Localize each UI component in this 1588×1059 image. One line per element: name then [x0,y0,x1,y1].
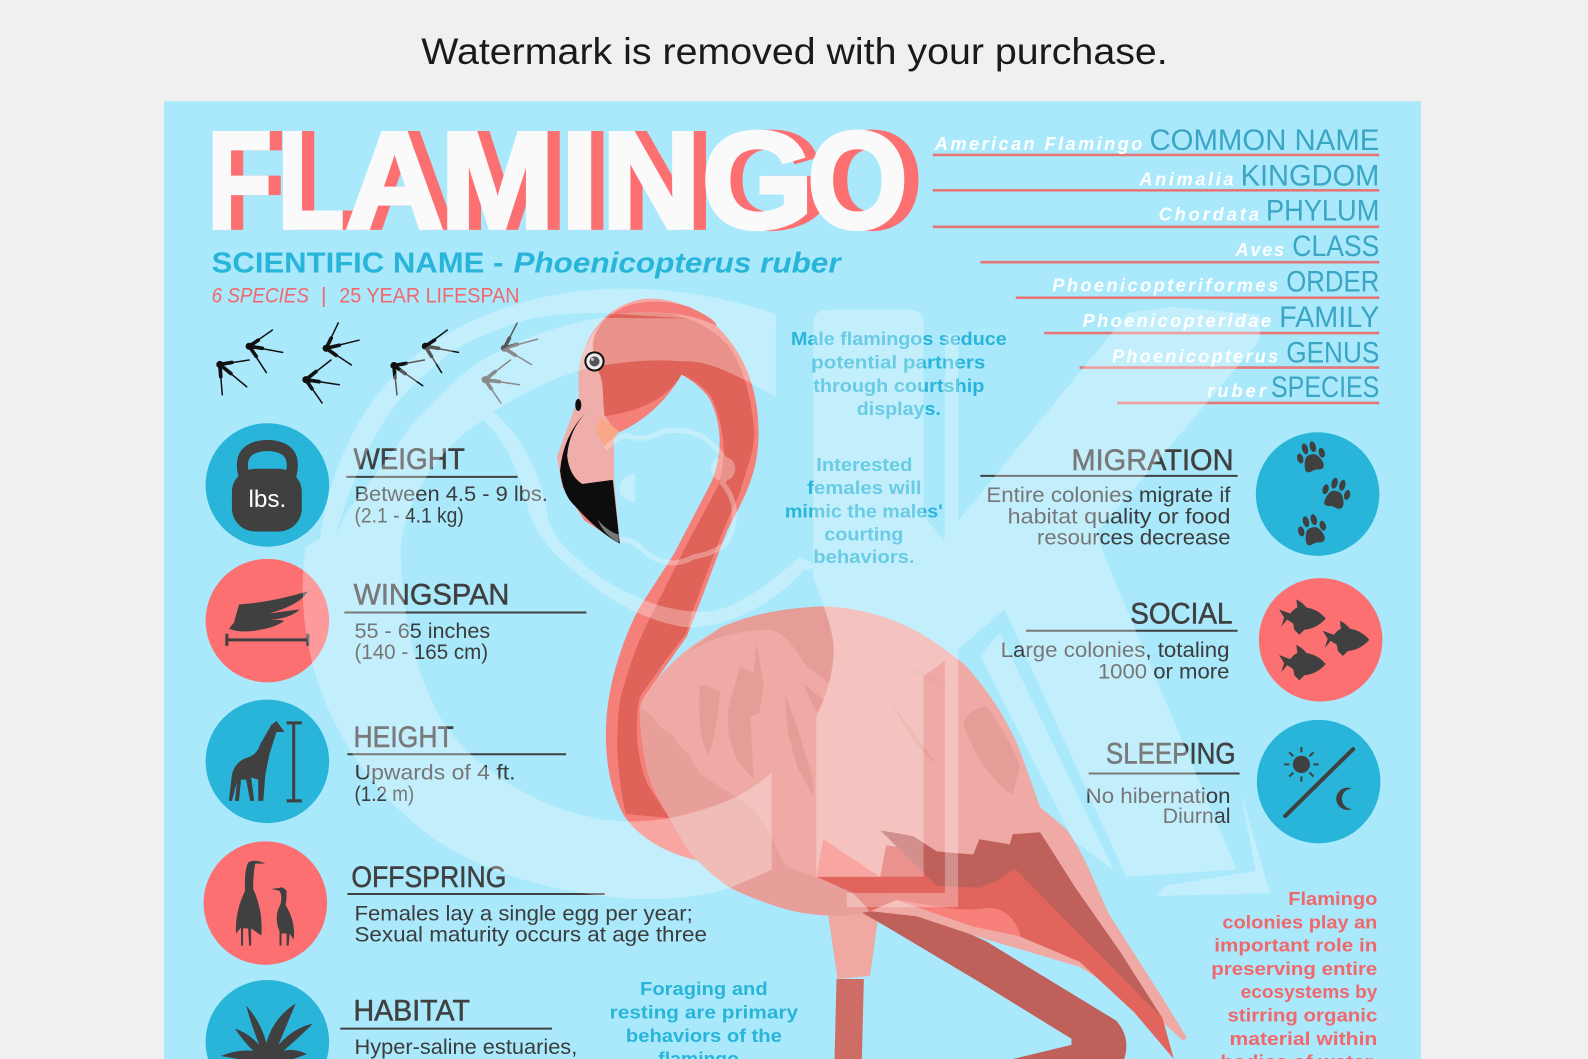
stat: wingspan: (140 - 165 cm) [354,640,488,664]
watermark: K arms [943,307,1260,877]
icon: paw prints [1256,432,1379,556]
watermark overlay [303,289,1270,907]
stat: weight: Between 4.5 - 9 lbs. [354,482,548,506]
title: O [821,104,922,258]
title: O [807,104,908,258]
watermark: K outer bracket [847,334,958,907]
watermark: blob two [711,457,735,481]
stat: offspring: Sexual maturity occurs at age three [354,923,707,947]
stat: height: Upwards of 4 ft. [354,761,515,785]
stat: social: 1000 or more [1098,659,1229,683]
species and lifespan: 25 YEAR LIFESPAN [339,284,520,308]
title: I [561,103,598,257]
watermark: large crescent [303,318,776,899]
flamingo feather shading [687,606,1020,797]
watermark notice: Watermark is removed with your purchase. [421,30,1168,72]
fact: foraging [610,979,799,1059]
watermark: cloud outline [606,430,734,563]
taxonomy list: COMMON NAME [1149,124,1379,157]
middle fact: courtship [791,329,1007,419]
flamingo head crown [612,302,717,326]
middle fact: females: behaviors. [813,547,915,567]
flamingo upper wing feather [893,665,966,700]
flamingo illustration [557,299,1187,1059]
taxonomy list: Phoenicopterus [1112,346,1278,366]
stat: migration [980,432,1379,556]
stat: habitat: Hyper-saline estuaries, [354,1035,577,1059]
fact: ecosystems [1211,889,1378,1059]
fact: ecosystems: colonies play an [1222,912,1377,932]
taxonomy list: SPECIES [1271,371,1379,404]
stat: migration: Entire colonies migrate if [986,483,1231,507]
flamingo face [557,315,617,486]
flamingo neck and head [557,299,759,861]
taxonomy list: ORDER [1286,266,1379,299]
fact: ecosystems: Flamingo [1288,889,1377,909]
stat: habitat: HABITAT [353,995,470,1028]
stat: social: Large colonies, totaling [1001,638,1229,662]
middle fact: courtship: Male flamingos seduce [791,329,1007,349]
title: M [452,104,567,258]
flamingo bent leg [861,900,1126,1059]
taxonomy list [933,124,1379,404]
taxonomy list: ruber [1207,381,1267,401]
stat: height: (1.2 m) [354,782,414,806]
stat: migration: MIGRATION [1071,444,1234,477]
middle fact: courtship: through courtship [813,376,984,396]
stat: weight [206,423,548,547]
taxonomy list: Phoenicopteriformes [1052,276,1278,296]
title: F [207,105,272,258]
icon: fish [1259,578,1382,702]
stat: sleeping: SLEEPING [1106,737,1236,770]
taxonomy list: Aves [1235,240,1284,260]
taxonomy list: Animalia [1138,169,1234,189]
fact: ecosystems: ecosystems by [1241,982,1378,1002]
taxonomy list: PHYLUM [1266,195,1379,228]
title: A [358,104,456,258]
title [207,103,922,258]
scientific name: Phoenicopterus ruber [513,247,843,279]
icon: sun and moon [1257,720,1380,843]
title: L [277,104,344,258]
stat: social [1001,578,1382,702]
fact: ecosystems: preserving entire [1211,959,1377,979]
scientific name: SCIENTIFIC NAME - [212,247,503,279]
icon: wing and span bar [206,559,329,682]
scientific name [212,247,843,279]
middle fact: females: Interested [816,455,912,475]
stat: wingspan [206,559,586,682]
flamingo tail coral tip [816,839,880,877]
stat: migration: resources decrease [1037,526,1230,550]
taxonomy list: CLASS [1292,230,1379,263]
stat: offspring: Females lay a single egg per year; [354,901,693,925]
flamingo tail dark [880,830,1163,1019]
stat: wingspan: 55 - 65 inches [354,619,490,643]
fact: foraging: behaviors of the [626,1026,782,1046]
watermark: blob [620,473,635,503]
title: N [602,104,701,258]
taxonomy list: GENUS [1286,336,1379,369]
fact: ecosystems: material within [1229,1029,1377,1049]
icon: giraffe and height bar [206,700,329,823]
title: N [614,104,713,258]
flamingo beak [560,399,620,544]
stat: height [206,700,566,823]
icon: adult and young bird [204,841,327,965]
middle fact: females: courting [824,525,903,545]
stat: migration: habitat quality or food [1008,504,1230,528]
flamingo neck dark band [593,310,755,818]
fact: foraging: Foraging and [640,979,768,999]
flamingo body [640,606,1187,1041]
flamingo eye [584,351,605,372]
middle fact: courtship: displays. [857,399,941,419]
stat: sleeping: No hibernation [1086,784,1230,808]
stat: social: SOCIAL [1130,598,1233,631]
icon: bird tracks [220,323,538,403]
title: L [289,104,357,258]
taxonomy list: FAMILY [1279,301,1379,334]
middle fact: courtship: potential partners [811,353,985,373]
fact: foraging: resting are primary [610,1003,799,1023]
icon: kettlebell [206,423,329,547]
stat: weight: WEIGHT [353,443,465,476]
taxonomy list: American Flamingo [934,134,1142,154]
taxonomy list: KINGDOM [1241,159,1379,192]
watermark: K junction [917,506,1005,676]
watermark: top arc band [320,289,776,540]
stat: weight: (2.1 - 4.1 kg) [354,503,464,527]
flamingo tail red [816,845,1174,1059]
watermark: ring [483,412,820,627]
title: I [573,103,610,257]
title: M [440,104,555,258]
species and lifespan: | [321,284,327,308]
watermark: K thin strip [980,633,1114,871]
watermark: K outer band [1157,792,1270,896]
title: G [714,103,826,257]
fact: ecosystems: important role in [1214,936,1377,956]
panel: background [164,101,1421,1059]
flamingo wing feather spike [929,650,964,668]
fact: ecosystems: stirring organic [1227,1006,1377,1026]
stat: offspring [204,841,707,965]
stat: wingspan: WINGSPAN [353,578,509,611]
middle fact: females [785,455,943,567]
stat: sleeping: Diurnal [1163,804,1230,828]
stat: sleeping [1086,720,1380,843]
icon: plant [206,980,329,1059]
stat: habitat [206,980,577,1059]
flamingo standing leg [825,896,881,1059]
middle fact: females: females will [807,478,922,498]
middle fact: females: mimic the males' [785,501,943,521]
flamingo chest shading [640,707,870,916]
species and lifespan [212,284,520,308]
icon: kettlebell: lbs. [248,486,286,513]
flamingo thigh [896,900,1021,936]
title: A [345,104,444,258]
watermark: K stem [813,310,924,877]
title: G [701,103,814,257]
taxonomy list: Chordata [1159,205,1259,225]
title: F [219,105,284,258]
stat: offspring: OFFSPRING [351,861,506,894]
taxonomy list: Phoenicopteridae [1083,311,1271,331]
species and lifespan: 6 SPECIES [212,284,309,308]
stat: height: HEIGHT [353,721,454,754]
